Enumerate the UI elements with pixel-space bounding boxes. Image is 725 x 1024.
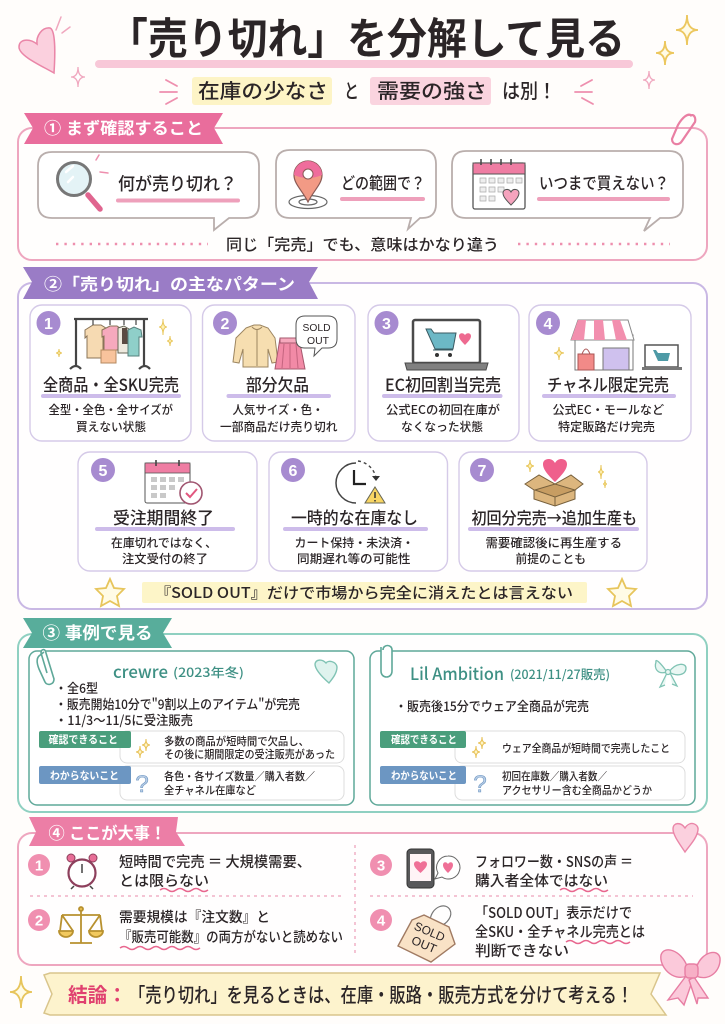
point 2: [28, 907, 343, 950]
case facts: ・販売開始10分で"9割以上のアイテム"が完売: [55, 694, 300, 713]
card 7: 需要確認後に再生産する: [486, 534, 622, 551]
panel: section 4: [18, 817, 707, 965]
callout: until when: いつまで買えない？: [539, 170, 669, 194]
card 2: 部分欠品: [246, 371, 309, 396]
card 6: 同期遅れ等の可能性: [297, 550, 410, 567]
card 6: 6: [289, 463, 298, 480]
card 2: [202, 305, 355, 441]
card 5: 在庫切れではなく、: [111, 534, 217, 551]
point 3: [370, 849, 633, 892]
confirmed box: [39, 731, 344, 763]
text: same sold out differs: 同じ「完売」でも、意味はかなり違う: [226, 233, 499, 255]
point 4: 判断できない: [475, 940, 569, 961]
icon: calendar with check: [145, 460, 202, 504]
card 2: 2: [221, 316, 230, 333]
card 4: チャネル限定完売: [547, 371, 669, 396]
icon: open box with heart: [525, 459, 583, 506]
unknown box: わからないこと: [50, 770, 119, 782]
title: 「売り切れ」を分解して見る: [108, 5, 625, 67]
ribbon: section 3 heading: [23, 618, 172, 648]
unknown box: アクセサリー含む全商品かどうか: [502, 782, 652, 798]
subtitle: 在庫の少なさ: [198, 75, 328, 104]
ribbon: section 1 heading: ① まず確認すること: [44, 119, 203, 138]
point 1: とは限らない: [119, 870, 209, 891]
card 7: 初回分完売→追加生産も: [472, 505, 637, 529]
case title: [113, 658, 244, 683]
icon: paperclip: [672, 115, 695, 144]
case title: (2021/11/27販売): [510, 664, 610, 683]
confirmed box: 多数の商品が短時間で欠品し、: [164, 733, 309, 749]
case facts: ・全6型: [55, 678, 98, 697]
icon: right star: [608, 579, 636, 606]
card 4: 公式EC・モールなど: [552, 401, 664, 418]
point 2: 需要規模は『注文数』と: [119, 907, 270, 927]
icon: sweater: [233, 325, 278, 367]
callout: what scope: [276, 150, 436, 229]
card 3: 公式ECの初回在庫が: [386, 401, 500, 418]
icon: shop and laptop: [571, 320, 682, 370]
icon: sold out tag: SOLD: [412, 919, 447, 945]
panel: section 3: [18, 618, 707, 812]
icon: sold out speech bubble: OUT: [307, 335, 330, 347]
unknown box: ?: [135, 771, 149, 798]
icon: paperclip: [37, 650, 54, 684]
card 1: 買えない状態: [76, 418, 146, 435]
unknown box: 初回在庫数／購入者数／: [502, 768, 607, 784]
ribbon: section 3 heading: ③ 事例で見る: [42, 624, 152, 643]
decoration: heart top left: [19, 17, 70, 73]
subtitle: と: [344, 75, 359, 104]
card 7: 7: [478, 463, 487, 480]
decoration: sparkles top: [71, 15, 698, 89]
icon: calendar with heart: [473, 159, 525, 209]
case facts: ・11/3〜11/5に受注販売: [55, 710, 193, 729]
case: Lil Ambition: [370, 646, 695, 805]
icon: paperclip: [381, 646, 392, 677]
unknown box: [380, 766, 685, 800]
point 3: フォロワー数・SNSの声 ＝: [475, 851, 633, 872]
icon: sold out speech bubble: [296, 316, 337, 356]
case title: (2023年冬): [173, 662, 244, 681]
point 4: 「SOLD OUT」表示だけで: [475, 902, 632, 923]
case title: [410, 660, 610, 685]
icon: gold sparkle: [10, 976, 32, 1008]
point 1: [28, 851, 311, 892]
banner: sold out note: 『SOLD OUT』だけで市場から完全に消えたとは言えない: [155, 582, 573, 603]
point 1: 1: [35, 858, 43, 874]
card 3: なくなった状態: [401, 418, 483, 435]
point 3: 3: [377, 858, 385, 874]
point 3: 購入者全体ではない: [475, 870, 608, 891]
icon: teal heart: [315, 660, 337, 683]
point 1: 短時間で完売 ＝ 大規模需要、: [119, 851, 311, 872]
icon: teal bow: [655, 660, 686, 687]
point 4: 4: [377, 912, 386, 930]
card 4: 特定販路だけ完売: [558, 418, 655, 435]
card 2: 人気サイズ・色・: [232, 401, 324, 418]
callout: what scope: どの範囲で？: [341, 170, 425, 194]
panel: section 2: [18, 267, 707, 609]
icon: phone and heart bubble: [407, 849, 460, 888]
card 1: 1: [44, 316, 53, 333]
ribbon: section 1 heading: [24, 113, 223, 144]
case: crewre: [29, 650, 354, 805]
icon: balance scale: [59, 907, 103, 943]
ribbon: section 2 heading: [23, 267, 318, 299]
card 3: 3: [382, 316, 391, 333]
card 5: 受注期間終了: [113, 504, 214, 529]
card 4: 4: [544, 316, 553, 333]
card 7: [459, 452, 647, 571]
callout: what sold out: 何が売り切れ？: [118, 171, 237, 196]
unknown box: ?: [473, 771, 487, 798]
confirmed box: 確認できること: [48, 733, 118, 746]
ribbon: section 2 heading: ②「売り切れ」の主なパターン: [44, 275, 295, 294]
point 2: 『販売可能数』の両方がないと読めない: [119, 927, 343, 947]
icon: pink heart: [673, 824, 698, 852]
card 5: [78, 452, 257, 571]
icon: magnifier: [58, 155, 108, 209]
case facts: [55, 678, 300, 729]
callout: until when: [452, 151, 683, 231]
unknown box: [39, 766, 344, 800]
icon: clock and warning: [336, 461, 385, 503]
icon: skirt: [275, 338, 305, 369]
confirmed box: ウェア全商品が短時間で完売したこと: [502, 740, 670, 756]
card 5: 注文受付の終了: [122, 550, 208, 567]
ribbon: section 4 heading: ④ ここが大事！: [48, 823, 166, 843]
icon: map pin: [289, 161, 327, 208]
card 1: [30, 305, 191, 441]
point 4: 全SKU・全チャネル完売とは: [475, 921, 645, 942]
icon: sparkles: [56, 319, 173, 357]
card 6: 一時的な在庫なし: [291, 504, 418, 529]
card 3: [368, 305, 519, 441]
case fact: ・販売後15分でウェア全商品が完売: [395, 696, 589, 715]
icon: alarm clock: [67, 854, 97, 889]
panel: section 1: [18, 113, 707, 260]
unknown box: わからないこと: [391, 770, 457, 782]
card 1: 全商品・全SKU完売: [43, 371, 179, 396]
confirmed box: [380, 731, 685, 763]
icon: sparkle: [554, 347, 564, 360]
icon: sparkles: [526, 460, 607, 488]
point 2: 2: [35, 912, 43, 930]
card 7: 前提のことも: [516, 550, 586, 567]
icon: left star: [96, 579, 124, 606]
icon: laptop with cart: [405, 320, 488, 370]
icon: sold out speech bubble: SOLD: [302, 322, 331, 334]
card 2: 一部商品だけ売り切れ: [220, 418, 338, 435]
callout: what sold out: [38, 152, 259, 230]
subtitle: 需要の強さ: [377, 75, 487, 104]
card 1: 全型・全色・全サイズが: [48, 401, 173, 418]
card 6: カート保持・未決済・: [294, 534, 414, 551]
icon: sold out tag: [398, 906, 455, 962]
case title: Lil Ambition: [410, 660, 504, 685]
banner: conclusion: [44, 973, 666, 1015]
banner: conclusion: 結論：: [68, 979, 127, 1008]
card 5: 5: [99, 463, 108, 480]
confirmed box: その後に期間限定の受注販売があった: [164, 746, 335, 762]
case title: crewre: [113, 658, 168, 683]
icon: sold out tag: OUT: [409, 933, 439, 956]
icon: clothes rack: [70, 319, 150, 369]
card 6: [269, 452, 448, 571]
unknown box: 各色・各サイズ数量／購入者数／: [164, 768, 315, 784]
confirmed box: 確認できること: [391, 733, 457, 746]
card 3: EC初回割当完売: [385, 371, 501, 396]
icon: pink bow: [661, 950, 720, 1005]
unknown box: 全チャネル在庫など: [164, 782, 256, 798]
card 4: [529, 305, 691, 441]
point 4: [370, 902, 645, 962]
subtitle: は別！: [502, 75, 556, 104]
subtitle: [160, 75, 593, 105]
ribbon: section 4 heading: [29, 817, 185, 846]
